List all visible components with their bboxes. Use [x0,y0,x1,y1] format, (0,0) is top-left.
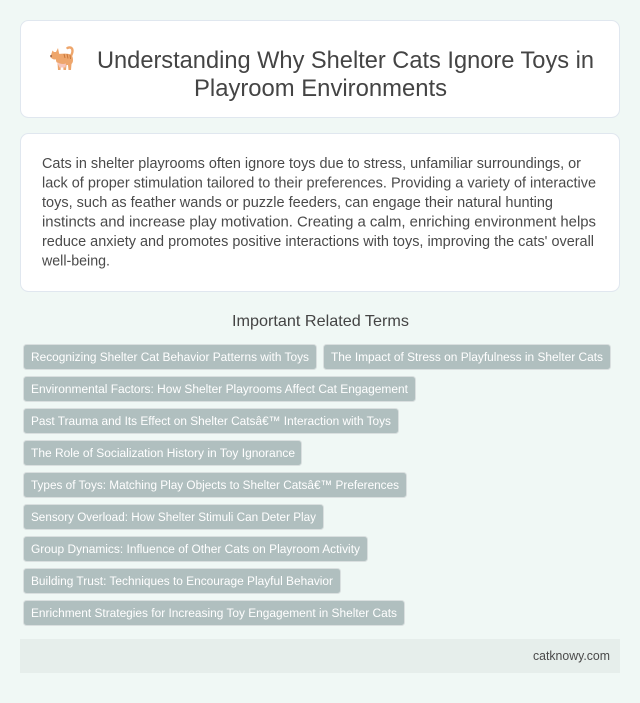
footer: catknowy.com [533,648,610,663]
chip 5 [24,440,302,466]
chip 7 [24,504,324,530]
chip 10: Enrichment Strategies for Increasing Toy Engagement in Shelter Cats [31,606,397,620]
chip 9: Building Trust: Techniques to Encourage Playful Behavior [31,574,333,588]
text block: description: lack of proper stimulation tailored to their preferences. Providing a variety of interactive [42,176,596,192]
footer [20,639,620,673]
chip 6 [24,472,406,498]
chip 1: Recognizing Shelter Cat Behavior Patterns with Toys [31,350,309,364]
title: Playroom Environments [194,75,447,102]
chip 10 [24,600,404,626]
title: Understanding Why Shelter Cats Ignore Toys in [97,47,594,74]
text block: description: well-being. [41,254,110,270]
text block: description: toys, such as feather wands or puzzle feeders, can engage their natural hunting [42,195,553,211]
text block: description: instincts and increase play motivation. Creating a calm, enriching environment helps [42,214,596,230]
chip 3: Environmental Factors: How Shelter Playrooms Affect Cat Engagement [31,382,409,396]
text block: description: reduce anxiety and promotes positive interactions with toys, improving the cats' overall [42,234,594,250]
heading: related terms: Important Related Terms [232,313,409,330]
chip 3 [24,376,416,402]
chip 4 [24,408,398,434]
chip 1 [24,344,316,370]
chip 9 [24,568,340,594]
chip 8: Group Dynamics: Influence of Other Cats on Playroom Activity [31,542,361,556]
panel: related term chips [24,344,610,626]
text block: description [41,156,596,270]
chip 2 [324,344,610,370]
chip 8 [24,536,368,562]
chip 5: The Role of Socialization History in Toy Ignorance [31,446,295,460]
text block: description: Cats in shelter playrooms often ignore toys due to stress, unfamiliar surroundings, or [42,156,581,172]
chip 6: Types of Toys: Matching Play Objects to Shelter Catsâ€™ Preferences [31,478,399,492]
icon: cat [50,47,73,70]
chip 2: The Impact of Stress on Playfulness in Shelter Cats [331,350,603,364]
panel: title card [20,20,620,118]
panel: description card [20,134,620,292]
chip 4: Past Trauma and Its Effect on Shelter Catsâ€™ Interaction with Toys [31,414,391,428]
chip 7: Sensory Overload: How Shelter Stimuli Can Deter Play [31,510,317,524]
title [97,47,594,102]
